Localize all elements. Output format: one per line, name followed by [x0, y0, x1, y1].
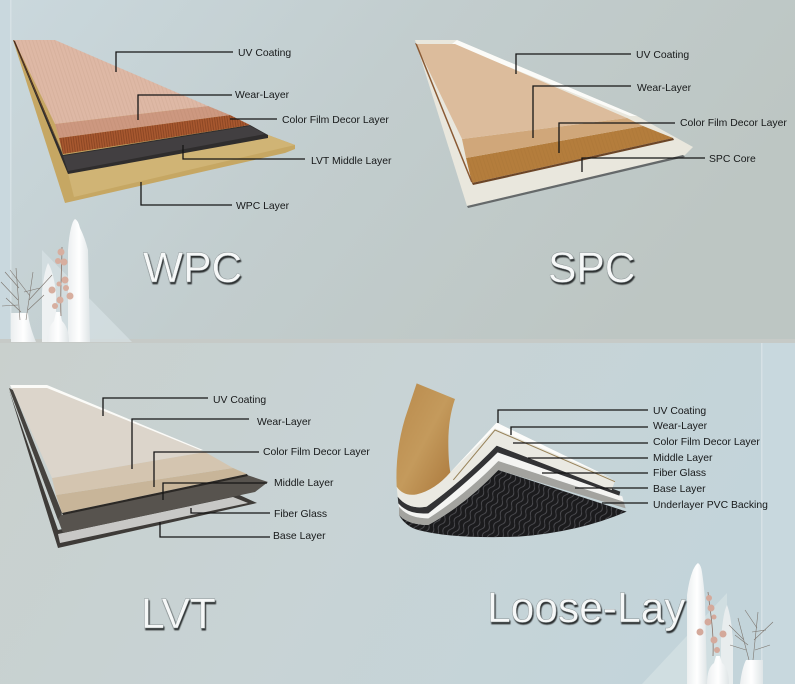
UV coating [12, 388, 205, 478]
panel: WPC background [0, 0, 795, 343]
wear layer line [453, 430, 615, 482]
callouts: Loose-Lay: Underlayer PVC Backing [653, 500, 768, 511]
color film decor layer [56, 468, 247, 513]
WPC layer [13, 40, 295, 203]
base layer [9, 390, 257, 548]
callouts: WPC [116, 48, 392, 212]
title: LVT: LVT [141, 591, 216, 638]
callouts: Loose-Lay [498, 406, 768, 511]
base layer [399, 461, 626, 525]
LVT middle layer [13, 40, 268, 174]
fiber glass [398, 452, 624, 518]
decoration: white vases and branches, top left [1, 219, 132, 342]
middle layer [9, 388, 268, 533]
callouts: WPC: Wear-Layer [235, 90, 290, 101]
wood surface [396, 383, 455, 495]
callouts: LVT: Color Film Decor Layer [263, 447, 370, 458]
brown left edge [13, 40, 63, 154]
white top edge [10, 385, 203, 450]
callouts: Loose-Lay: Base Layer [653, 484, 706, 495]
fiber glass [58, 497, 248, 543]
color film decor layer [466, 126, 673, 183]
middle layer [398, 446, 620, 514]
callouts: SPC [516, 50, 787, 172]
diagram: SPC plank [415, 40, 693, 208]
panel: Loose-Lay and LVT background [0, 343, 795, 684]
callouts: Loose-Lay: UV Coating [653, 406, 706, 417]
callouts: Loose-Lay: Middle Layer [653, 453, 713, 464]
callouts: LVT: UV Coating [213, 395, 266, 406]
callouts: SPC: UV Coating [636, 50, 689, 61]
decoration: white vases and branches, bottom right [642, 563, 773, 684]
title: Loose-Lay: Loose-Lay [487, 585, 686, 632]
SPC core [415, 40, 693, 206]
callouts: LVT: Base Layer [273, 531, 326, 542]
callouts: LVT: Wear-Layer [257, 417, 312, 428]
color film decor layer [59, 115, 250, 154]
callouts: SPC: Color Film Decor Layer [680, 118, 787, 129]
wear layer [462, 118, 643, 158]
callouts: Loose-Lay: Fiber Glass [653, 468, 706, 479]
callouts: WPC: WPC Layer [236, 201, 290, 212]
callouts: SPC: Wear-Layer [637, 83, 692, 94]
callouts: WPC: UV Coating [238, 48, 291, 59]
callouts: Loose-Lay: Color Film Decor Layer [653, 437, 760, 448]
callouts: Loose-Lay: Wear-Layer [653, 421, 708, 432]
wear layer [52, 452, 233, 495]
PVC backing with wave pattern [399, 470, 627, 537]
callouts: WPC: LVT Middle Layer [311, 156, 392, 167]
UV coating [450, 423, 613, 479]
diagram: LVT plank [9, 385, 268, 548]
color film layer [397, 423, 615, 507]
callouts: WPC: Color Film Decor Layer [282, 115, 389, 126]
diagram: WPC plank [13, 40, 295, 203]
wear layer [55, 106, 230, 138]
callouts: SPC: SPC Core [709, 154, 756, 165]
title: SPC: SPC [548, 245, 635, 292]
UV coating [416, 44, 627, 139]
diagram: Loose-Lay curled plank [396, 383, 627, 537]
callouts: LVT [103, 395, 370, 542]
title: WPC: WPC [143, 245, 242, 292]
callouts: LVT: Middle Layer [274, 478, 334, 489]
UV coating [14, 40, 208, 124]
callouts: LVT: Fiber Glass [274, 509, 327, 520]
